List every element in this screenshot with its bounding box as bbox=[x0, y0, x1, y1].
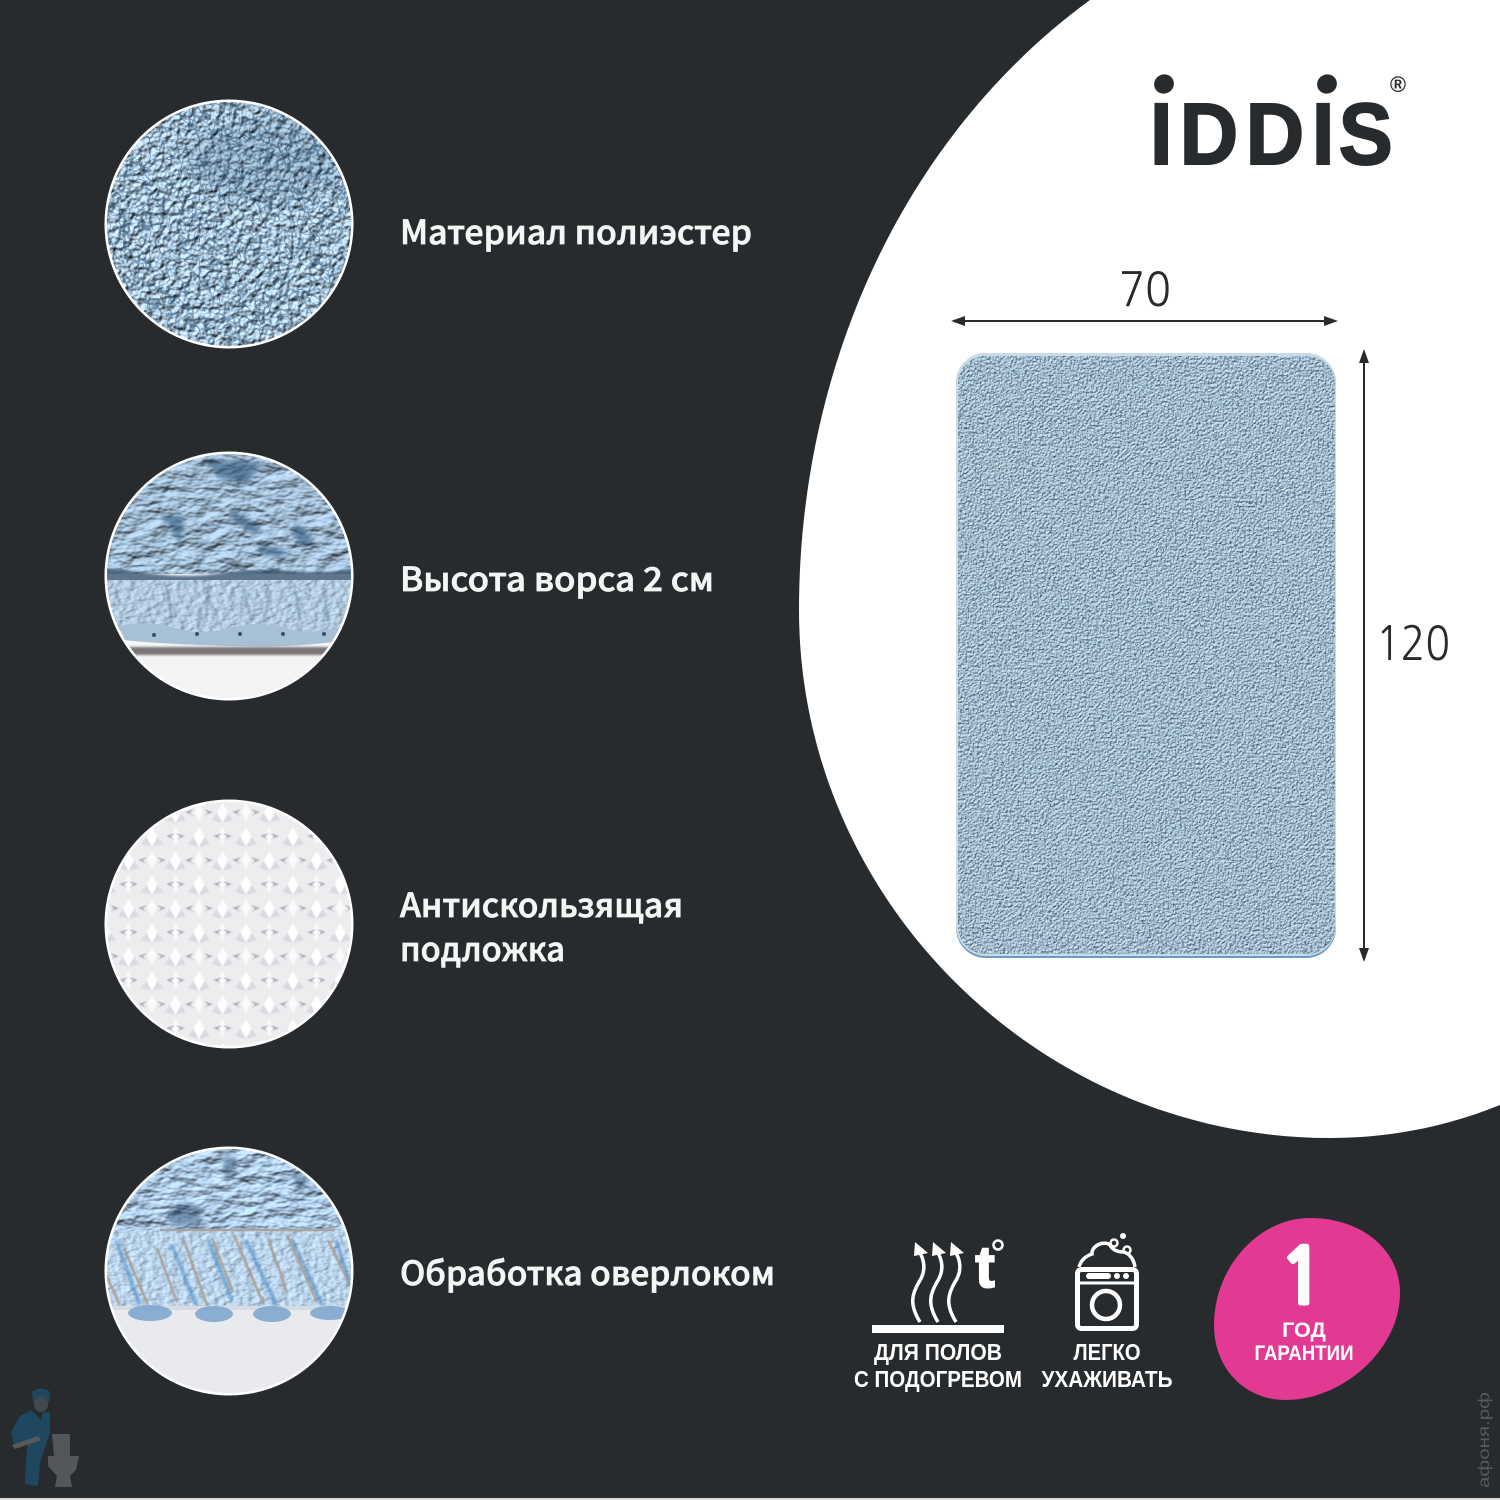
photo circle: pile height bbox=[104, 452, 354, 700]
icon: underfloor heating bbox=[872, 1235, 1004, 1333]
label: underfloor heating: ДЛЯ ПОЛОВ bbox=[874, 1339, 1002, 1365]
label: easy care: ЛЕГКО bbox=[1074, 1339, 1140, 1365]
label: easy care: УХАЖИВАТЬ bbox=[1042, 1366, 1173, 1392]
label: easy care bbox=[1042, 1339, 1173, 1392]
badge: 1 year warranty: ГАРАНТИИ bbox=[1254, 1341, 1354, 1365]
label: underfloor heating bbox=[854, 1339, 1022, 1392]
photo circle: overlock finish bbox=[104, 1146, 354, 1396]
badge: 1 year warranty bbox=[1214, 1218, 1400, 1400]
dimension: width 70 bbox=[951, 266, 1338, 326]
photo circle: pile material bbox=[104, 100, 354, 348]
feature text: anti-slip backing: Антискользящая bbox=[400, 879, 683, 927]
feature text: material: Материал полиэстер bbox=[400, 206, 752, 254]
feature text: anti-slip backing bbox=[400, 879, 683, 971]
watermark text: афоня.рф bbox=[1476, 1392, 1493, 1488]
feature text: anti-slip backing: подложка bbox=[400, 923, 565, 971]
icon: washing machine bbox=[1078, 1233, 1137, 1328]
dimension: height 120: 120 bbox=[1376, 620, 1450, 667]
feature text: overlock finish: Обработка оверлоком bbox=[400, 1247, 775, 1295]
badge: 1 year warranty: 1 bbox=[1279, 1240, 1325, 1316]
logo: IDDIS: ® bbox=[1390, 72, 1406, 97]
badge: 1 year warranty: ГОД bbox=[1282, 1318, 1326, 1342]
feature text: pile height: Высота ворса 2 см bbox=[400, 553, 714, 601]
photo circle: anti-slip backing bbox=[100, 795, 358, 1053]
label: underfloor heating: С ПОДОГРЕВОМ bbox=[854, 1366, 1022, 1392]
panel: white product area bbox=[799, 0, 1500, 1138]
dimension: height 120 bbox=[1359, 349, 1450, 962]
icon: underfloor heating: t bbox=[975, 1235, 995, 1300]
watermark icon: plumber with toilet bbox=[11, 1388, 79, 1487]
product image: blue bath mat bbox=[956, 353, 1336, 958]
dimension: width 70: 70 bbox=[1119, 266, 1171, 313]
logo: IDDIS: IDDIS bbox=[1150, 85, 1393, 183]
